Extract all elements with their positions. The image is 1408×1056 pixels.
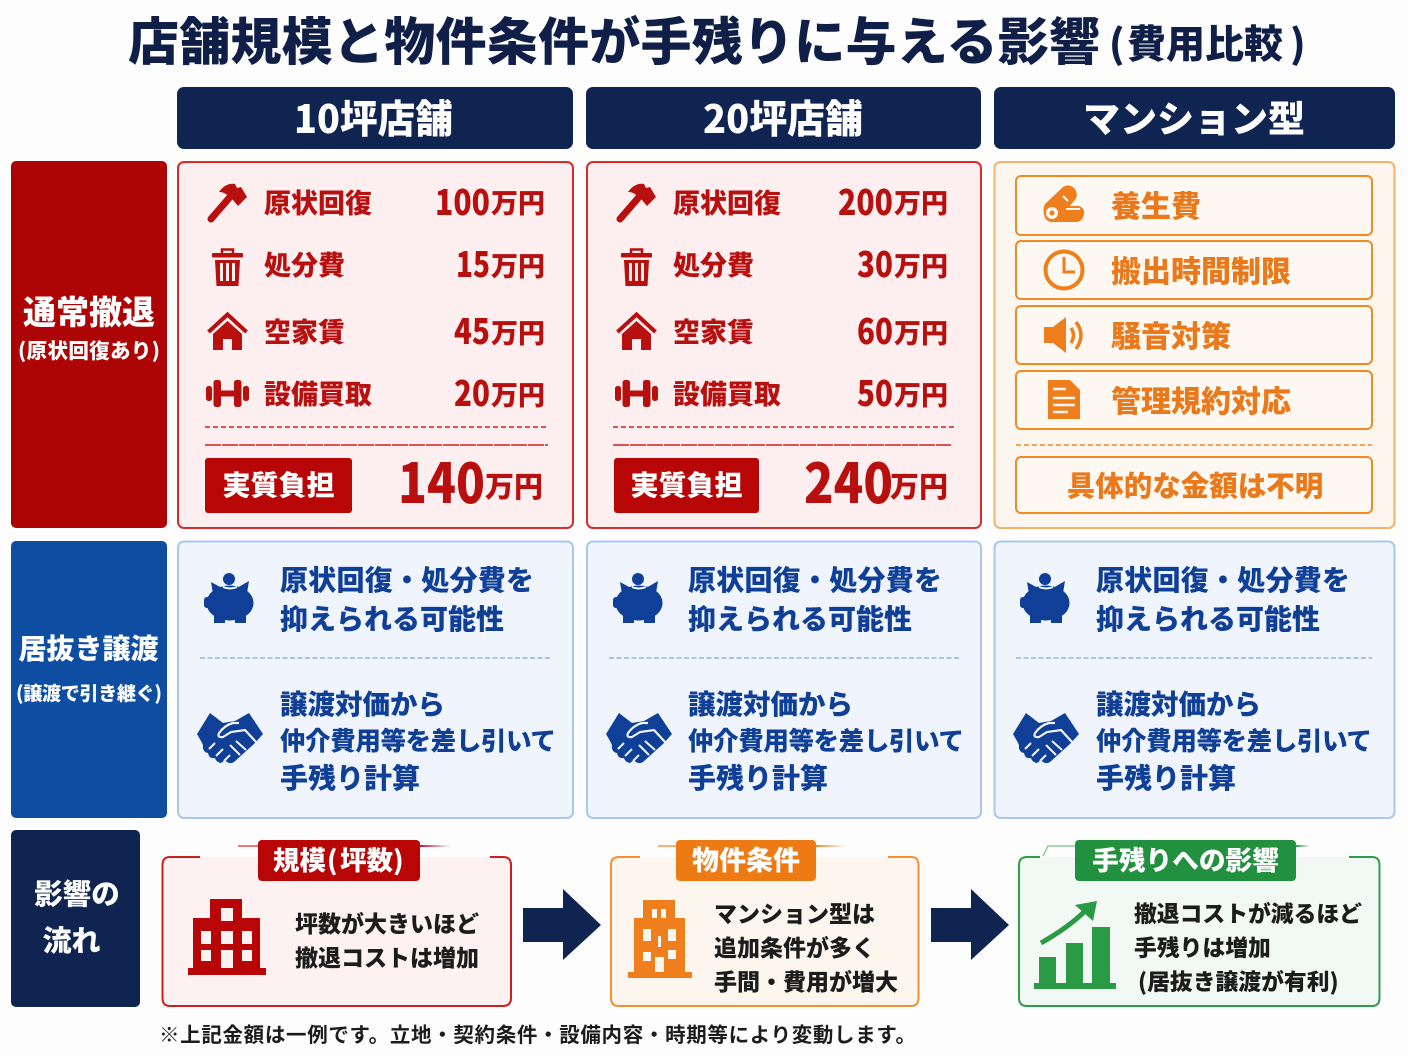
total: 実質負担 240万円: 240 [804, 439, 893, 519]
text: 原状回復・処分費を [280, 559, 534, 638]
item: 処分費: 万円 [491, 245, 545, 284]
row label: 影響の流れ: 影響の [34, 872, 120, 913]
arrow [523, 889, 601, 960]
icon: handshake [606, 713, 672, 763]
icon: hammer [620, 184, 656, 219]
column header: 10坪店舗 [177, 87, 573, 149]
text: 撤退コストは増加 [295, 939, 479, 973]
text: 原状回復・処分費を: 原状回復・処分費を [1096, 559, 1350, 599]
text: マンション型は [714, 895, 875, 929]
text: 譲渡対価から: 仲介費用等を差し引いて [280, 721, 556, 758]
item: 設備買取: 50 [857, 366, 893, 417]
item: 管理規約対応 [1016, 371, 1372, 429]
item: 処分費: 処分費 [673, 244, 754, 283]
icon: growth chart [1034, 901, 1116, 989]
item: 原状回復 [264, 175, 545, 226]
row label: 通常撤退 [11, 161, 167, 528]
item: 搬出時間制限 [1016, 241, 1372, 299]
item: 空家賃: 45 [454, 304, 490, 355]
arrow [931, 889, 1009, 960]
tag: ( [327, 839, 338, 878]
column header: マンション型 [994, 87, 1395, 149]
text: 手残りは増加 [1134, 930, 1271, 963]
panel: マンション型 居抜き譲渡 [994, 542, 1394, 818]
text: 譲渡対価から: 仲介費用等を差し引いて [1096, 721, 1372, 758]
item: 具体的な金額は不明 [1016, 457, 1372, 513]
item: 空家賃 [264, 304, 545, 355]
text [1134, 896, 1362, 997]
text: 譲渡対価から: 仲介費用等を差し引いて [688, 721, 964, 758]
row label: 影響の流れ: 流れ [42, 918, 101, 960]
tag: ) [393, 839, 404, 878]
text: 譲渡対価から [280, 682, 556, 797]
total: 実質負担 140万円: 実質負担 [222, 464, 335, 504]
text [714, 895, 898, 997]
text: (居抜き譲渡が有利) [1138, 964, 1339, 997]
item: 設備買取: 万円 [894, 374, 948, 413]
item: 搬出時間制限: 搬出時間制限 [1111, 247, 1291, 291]
item: 設備買取: 設備買取 [673, 373, 781, 412]
text: 原状回復・処分費を: 原状回復・処分費を [280, 559, 534, 599]
tag: 坪数 [340, 839, 394, 878]
text: 譲渡対価から: 手残り計算 [280, 757, 420, 797]
text: 原状回復・処分費を [1096, 559, 1350, 638]
item: 設備買取: 20 [454, 366, 490, 417]
row label: 通常撤退: 通常撤退 [23, 286, 155, 334]
item: 設備買取: 設備買取 [264, 373, 372, 412]
item: 空家賃: 万円 [491, 312, 545, 351]
panel: 10坪 居抜き譲渡 [178, 542, 573, 818]
text: 手間・費用が増大 [714, 963, 898, 997]
row label: 居抜き譲渡: 居抜き譲渡 [18, 628, 159, 668]
item: 空家賃: 空家賃 [673, 311, 754, 350]
column header: マンション型: マンション型 [1083, 89, 1305, 143]
text: 譲渡対価から [688, 682, 964, 797]
tag [258, 839, 420, 881]
icon: house [208, 314, 246, 350]
text: 原状回復・処分費を: 原状回復・処分費を [688, 559, 942, 599]
title: ) [1290, 14, 1306, 70]
row label: 通常撤退: (原状回復あり) [18, 334, 160, 364]
flow box: 規模(坪数) [162, 839, 511, 1006]
icon: dumbbell [206, 380, 249, 407]
item: 具体的な金額は不明: 具体的な金額は不明 [1067, 464, 1323, 505]
item: 原状回復: 原状回復 [673, 182, 781, 221]
total: 実質負担 240万円: 万円 [890, 464, 948, 506]
item: 処分費: 万円 [894, 245, 948, 284]
item: 処分費 [264, 237, 545, 288]
icon: handshake [197, 713, 263, 763]
item: 設備買取 [264, 366, 545, 417]
text: 譲渡対価から: 譲渡対価から [280, 682, 445, 722]
icon: piggy bank [204, 573, 254, 623]
item: 原状回復: 100 [435, 175, 490, 226]
total: 実質負担 140万円: 140 [398, 439, 485, 519]
tag: 手残りへの影響 [1092, 839, 1279, 878]
item: 処分費: 処分費 [264, 244, 345, 283]
text: 譲渡対価から: 譲渡対価から [1096, 682, 1261, 722]
text: 譲渡対価から: 手残り計算 [688, 757, 828, 797]
icon: house [618, 314, 656, 350]
text: 撤退コストが減るほど [1134, 896, 1362, 929]
total: 実質負担 240万円: 実質負担 [630, 464, 743, 504]
title: 費用比較 [1127, 14, 1283, 70]
text: 原状回復・処分費を [688, 559, 942, 638]
panel: 20坪 居抜き譲渡 [587, 542, 981, 818]
item: 騒音対策 [1016, 306, 1372, 364]
column header: 20坪店舗: 20坪店舗 [703, 89, 863, 145]
title: 店舗規模と物件条件が手残りに与える影響 [128, 1, 1100, 75]
item: 処分費 [673, 237, 948, 288]
icon: trash [621, 250, 652, 286]
panel: 20坪 通常撤退 [587, 162, 981, 528]
item: 原状回復 [673, 175, 948, 226]
total: 実質負担 240万円 [614, 439, 948, 519]
item: 空家賃: 60 [857, 304, 893, 355]
item: 原状回復: 万円 [894, 182, 948, 221]
item: 原状回復: 200 [838, 175, 893, 226]
item: 設備買取: 万円 [491, 374, 545, 413]
panel: マンション型 通常撤退 [994, 162, 1394, 528]
icon: hammer [211, 184, 247, 219]
item: 処分費: 15 [456, 237, 490, 288]
text [295, 905, 479, 973]
title: ( [1109, 14, 1125, 70]
column header: 10坪店舗: 10坪店舗 [294, 89, 453, 145]
panel: 10坪 通常撤退 [178, 162, 573, 528]
row label: 影響の流れ [11, 830, 140, 1007]
footnote: ※上記金額は一例です。立地・契約条件・設備内容・時期等により変動します。 [159, 1018, 916, 1048]
icon: piggy bank [613, 573, 662, 623]
icon: building [188, 899, 266, 975]
text: 譲渡対価から [1096, 682, 1372, 797]
icon: trash [212, 250, 243, 286]
item: 空家賃 [673, 304, 948, 355]
text: 坪数が大きいほど [295, 905, 479, 939]
item: 空家賃: 万円 [894, 312, 948, 351]
item: 管理規約対応: 管理規約対応 [1111, 377, 1291, 421]
text: 原状回復・処分費を: 抑えられる可能性 [688, 598, 912, 638]
text: 原状回復・処分費を: 抑えられる可能性 [280, 598, 504, 638]
total: 実質負担 140万円: 万円 [485, 464, 543, 506]
text: 追加条件が多く [714, 929, 875, 963]
icon: piggy bank [1020, 573, 1070, 623]
item: 養生費 [1016, 176, 1372, 235]
flow box: 物件条件 [611, 839, 918, 1006]
item: 空家賃: 空家賃 [264, 311, 345, 350]
text: 原状回復・処分費を: 抑えられる可能性 [1096, 598, 1320, 638]
tag: 規模 [273, 839, 326, 878]
item: 養生費: 養生費 [1111, 182, 1201, 226]
icon: dumbbell [615, 380, 658, 407]
item: 原状回復: 万円 [491, 182, 545, 221]
row label: 居抜き譲渡: (譲渡で引き継ぐ) [16, 679, 162, 706]
icon: handshake [1013, 713, 1079, 763]
flow box: 手残りへの影響 [1019, 839, 1380, 1006]
row label: 居抜き譲渡 [11, 541, 167, 818]
icon: mansion building [628, 900, 692, 978]
column header: 20坪店舗 [586, 87, 981, 149]
total: 実質負担 140万円 [205, 439, 543, 519]
item: 設備買取 [673, 366, 948, 417]
item: 騒音対策: 騒音対策 [1111, 312, 1231, 356]
tag: 物件条件 [692, 839, 800, 878]
item: 原状回復: 原状回復 [264, 182, 372, 221]
item: 処分費: 30 [857, 237, 893, 288]
text: 譲渡対価から: 手残り計算 [1096, 757, 1236, 797]
text: 譲渡対価から: 譲渡対価から [688, 682, 853, 722]
